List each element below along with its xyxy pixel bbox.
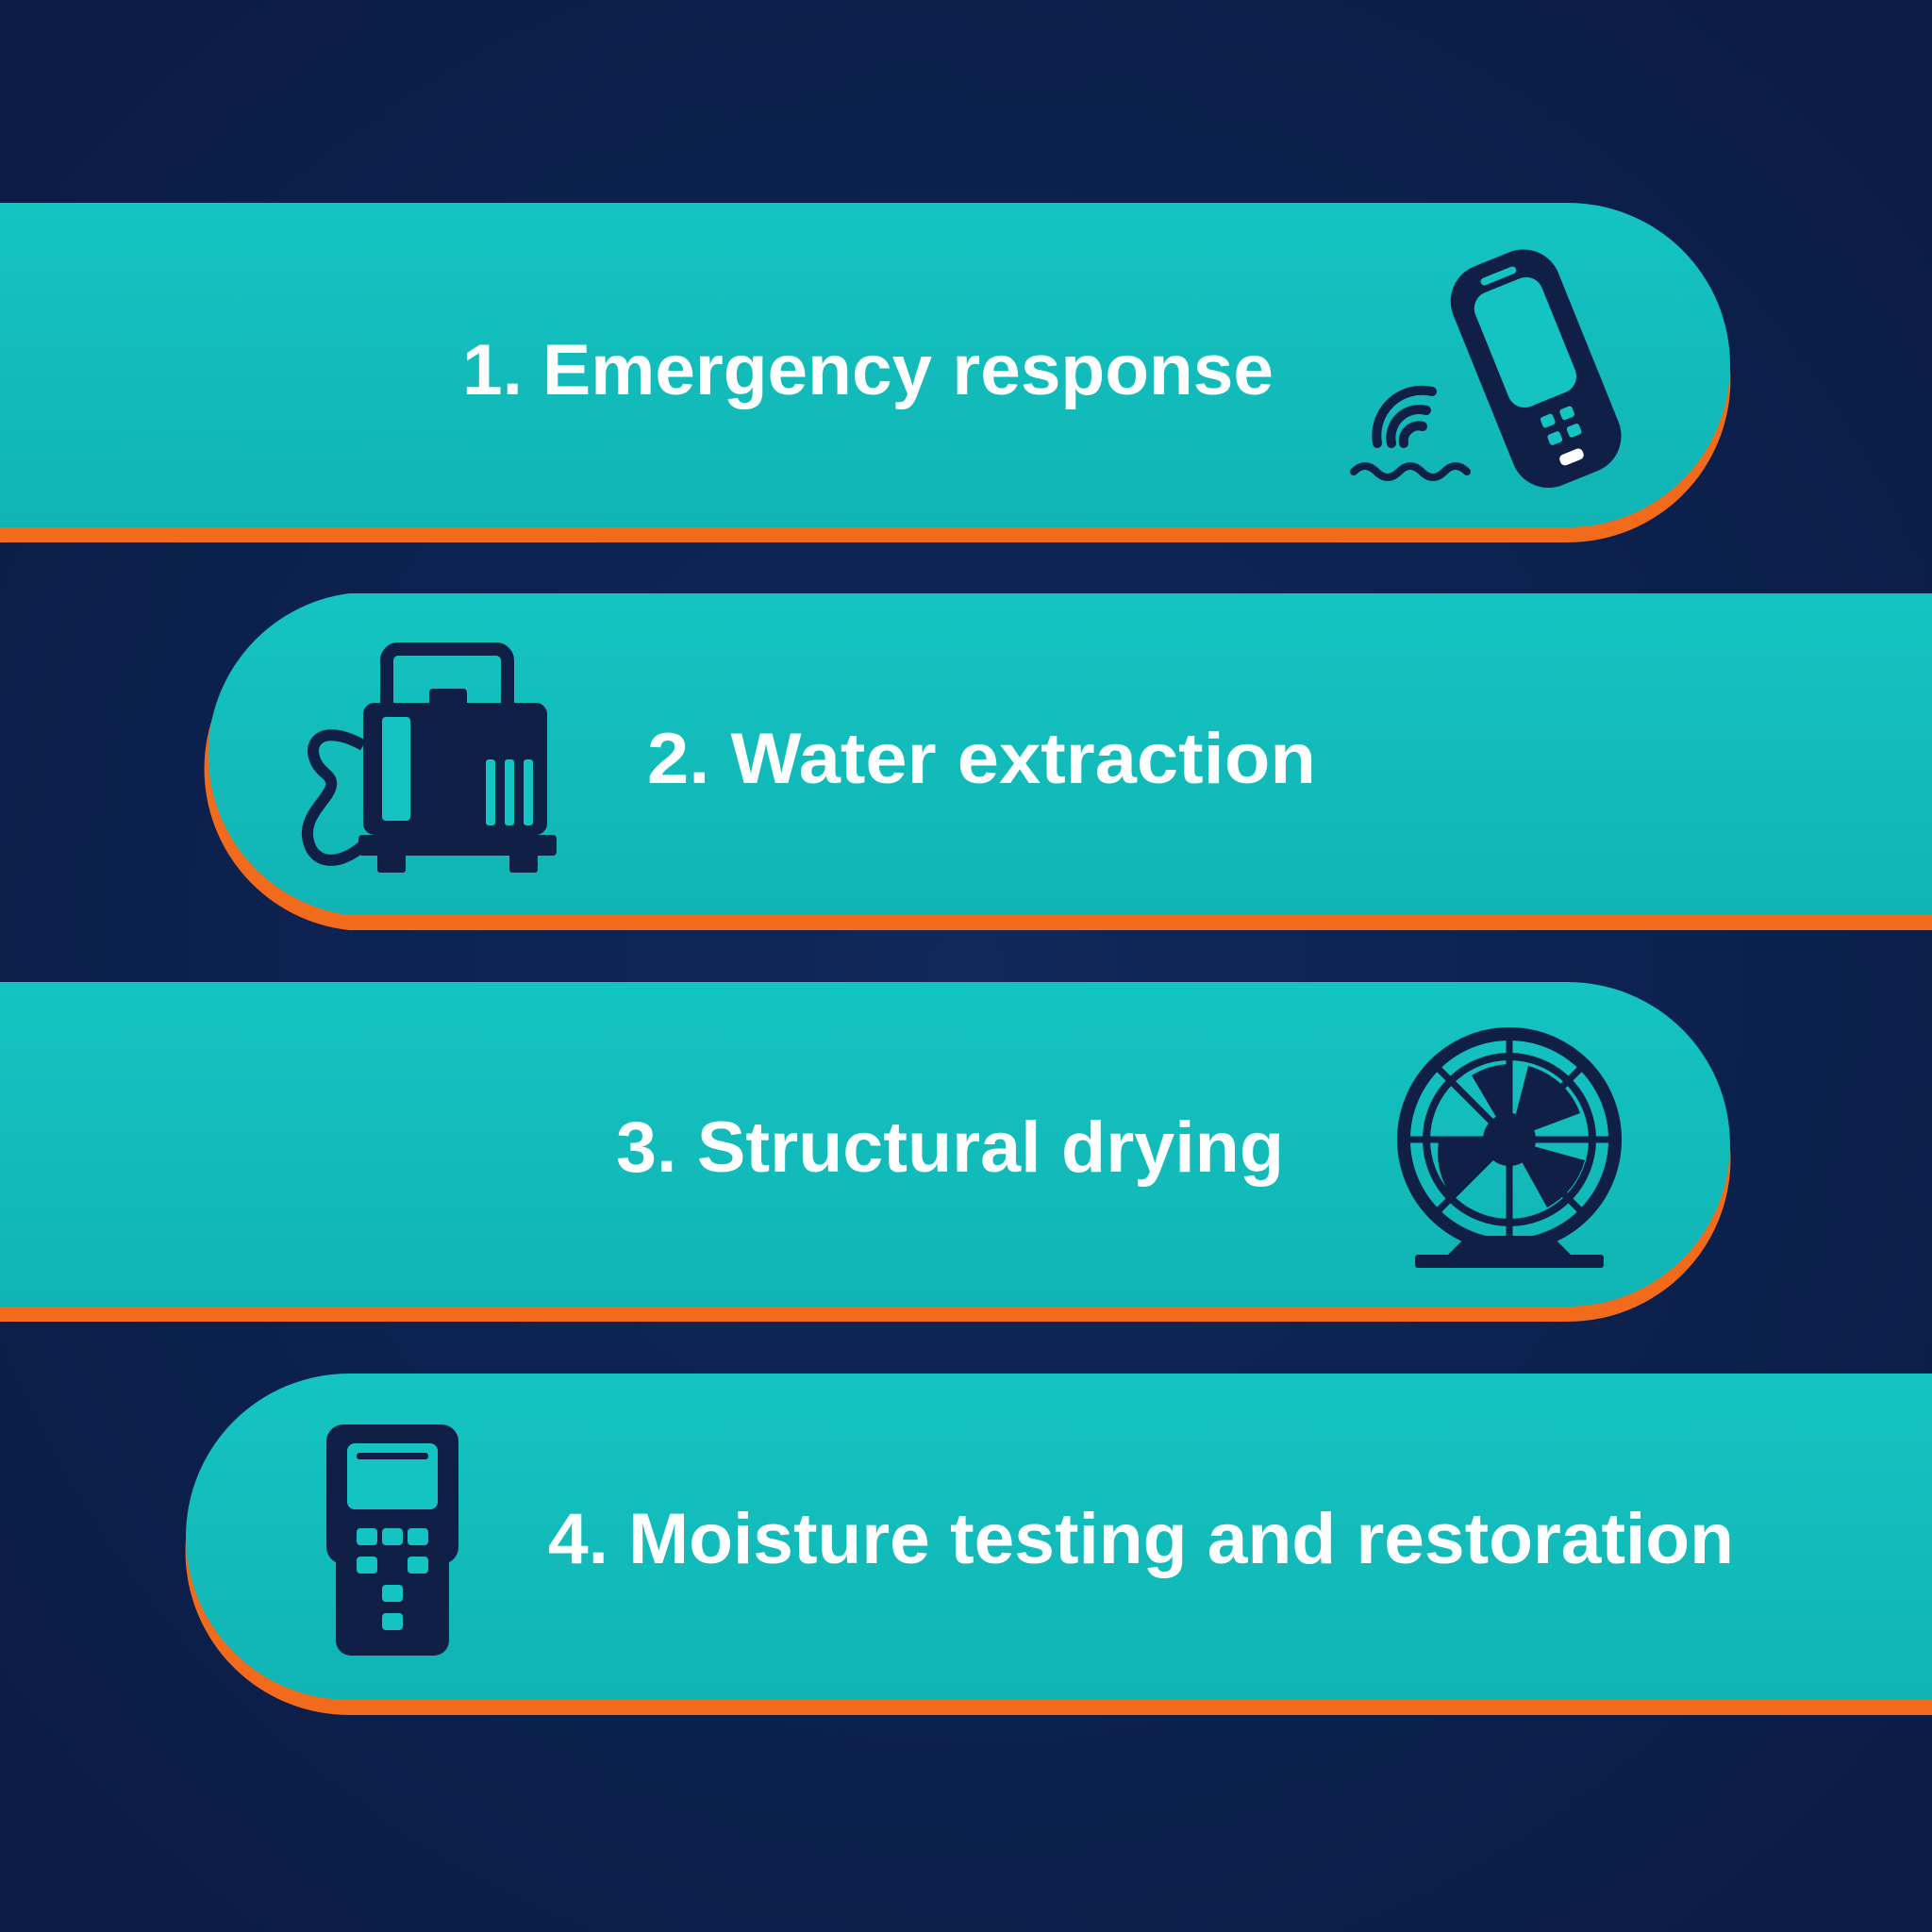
panel: step 2 bbox=[205, 593, 1932, 930]
icon: drying fan bbox=[1404, 1034, 1615, 1268]
panel: step 4 bbox=[185, 1374, 1932, 1715]
heading: step 2: 2. Water extraction bbox=[647, 719, 1316, 799]
icon: moisture meter bbox=[326, 1424, 458, 1656]
icon: phone with signal bbox=[1354, 238, 1633, 499]
panel: step 1 bbox=[0, 203, 1730, 542]
heading: step 1: 1. Emergency response bbox=[462, 330, 1274, 410]
heading: step 3: 3. Structural drying bbox=[616, 1108, 1284, 1188]
heading: step 4: 4. Moisture testing and restoration bbox=[548, 1499, 1734, 1579]
panel: step 3 bbox=[0, 982, 1730, 1322]
icon: extraction pump bbox=[308, 649, 557, 873]
